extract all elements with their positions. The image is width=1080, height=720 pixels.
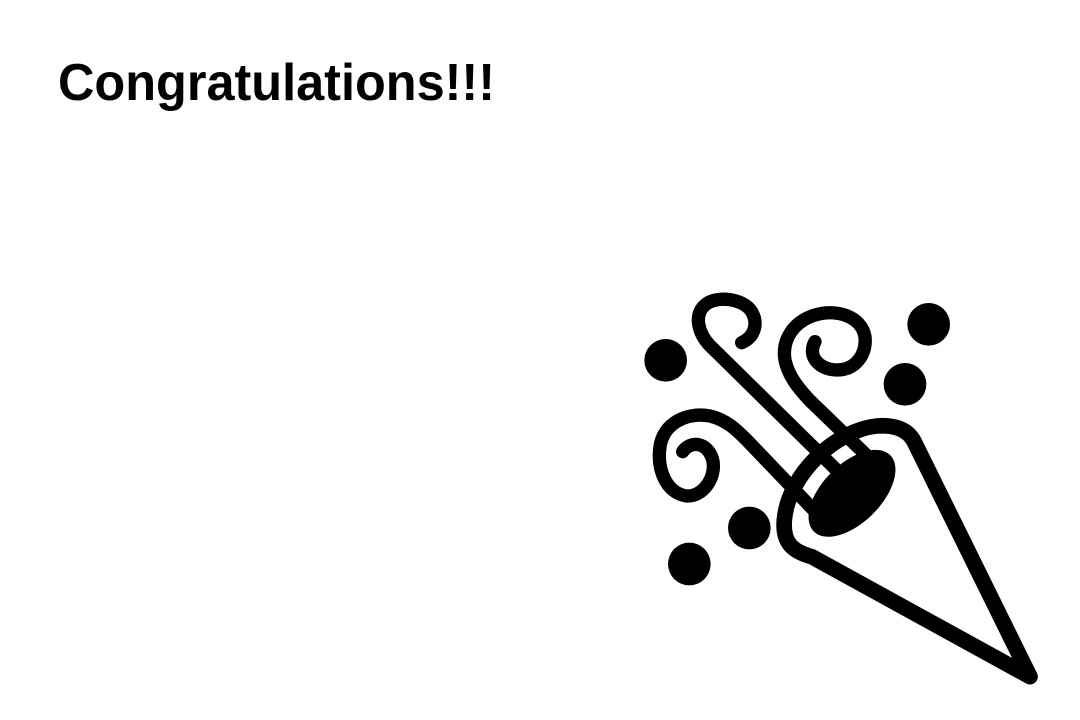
streamers: [659, 299, 878, 518]
popper cone: [784, 426, 1030, 677]
icon: party popper: [644, 299, 1030, 677]
confetti dots: [644, 303, 950, 585]
popper opening: [793, 434, 911, 552]
title: Congratulations!!!: [58, 54, 495, 112]
